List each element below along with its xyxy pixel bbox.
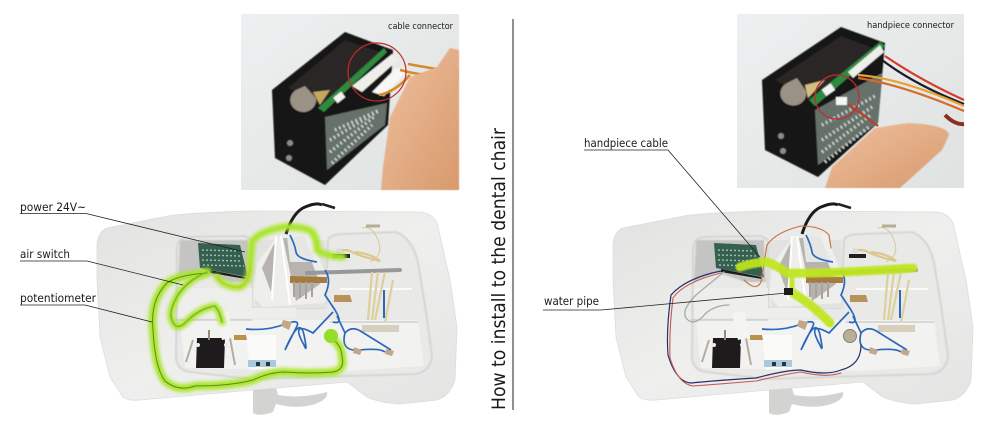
icon: red highlight circle bbox=[348, 43, 406, 101]
icon: cable wires bbox=[379, 64, 459, 95]
label: power 24V~: power 24V~ bbox=[20, 200, 86, 214]
thin coloured cable bbox=[667, 226, 861, 386]
icon: black valve bbox=[784, 288, 793, 295]
green highlighted wiring bbox=[153, 227, 343, 388]
icon: hand holding plug bbox=[825, 123, 949, 188]
panel: right tray with highlighted water pipe bbox=[613, 204, 973, 415]
label: potentiometer bbox=[20, 291, 152, 322]
label: water pipe: water pipe bbox=[544, 294, 599, 308]
label: air switch: air switch bbox=[20, 247, 70, 261]
icon: potentiometer disc bbox=[844, 330, 856, 342]
icon: black control box bbox=[272, 32, 408, 185]
title: vertical heading: How to install to the dental chair bbox=[488, 128, 510, 410]
icon: red highlight circle bbox=[815, 75, 859, 119]
label: power 24V~ bbox=[20, 200, 245, 252]
icon: black control box with board bbox=[762, 27, 885, 177]
green highlighted water pipe bbox=[740, 262, 913, 323]
label: handpiece cable bbox=[584, 136, 760, 257]
panel: cable connector photo bbox=[241, 14, 459, 190]
icon: hand holding cable bbox=[381, 48, 459, 190]
label: water pipe bbox=[543, 293, 787, 310]
panel: handpiece connector photo bbox=[737, 14, 964, 188]
center divider line bbox=[512, 19, 514, 410]
icon: ribbon cables bbox=[848, 56, 964, 126]
label: potentiometer: potentiometer bbox=[20, 291, 96, 305]
label: handpiece cable: handpiece cable bbox=[584, 136, 668, 150]
label: cable connector: cable connector bbox=[388, 22, 453, 32]
label: air switch bbox=[20, 247, 183, 285]
panel: left tray with highlighted wiring bbox=[97, 204, 457, 415]
label: handpiece connector: handpiece connector bbox=[867, 21, 954, 31]
